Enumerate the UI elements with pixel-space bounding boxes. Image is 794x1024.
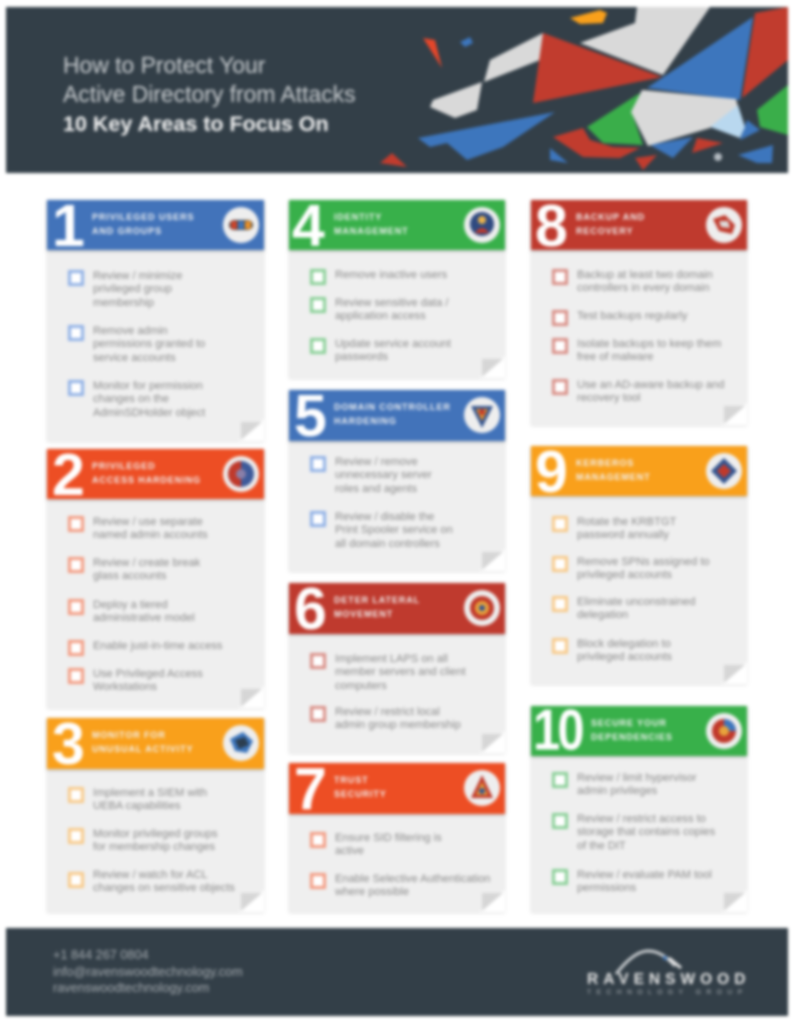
logo: Ravenswood Technology Group: RAVENSWOOD bbox=[587, 971, 750, 988]
panel: 1 privileged users and groups bbox=[47, 200, 264, 441]
panel header 3: UNUSUAL ACTIVITY bbox=[92, 744, 193, 754]
checklist item bbox=[66, 666, 204, 693]
panel: 7 trust security: where possible bbox=[335, 886, 409, 898]
panel header 5: DOMAIN CONTROLLER bbox=[334, 402, 451, 412]
panel: 2 privileged access hardening: glass accounts bbox=[93, 570, 166, 582]
panel header 10 bbox=[531, 706, 747, 756]
panel header 3: 3 bbox=[52, 711, 85, 777]
checklist item bbox=[550, 514, 676, 542]
panel header 6 bbox=[289, 583, 505, 634]
panel: 8 backup and recovery: free of malware bbox=[577, 351, 653, 363]
panel: 1 privileged users and groups: Review / minimize bbox=[93, 270, 182, 282]
panel: 7 trust security: Ensure SID filtering is bbox=[335, 832, 442, 844]
panel: 5 domain controller hardening: unnecessary server bbox=[335, 469, 432, 481]
panel header 7: TRUST bbox=[334, 775, 368, 785]
checklist item bbox=[66, 826, 218, 854]
panel: 1 privileged users and groups: Remove admin bbox=[93, 324, 168, 336]
panel: 5 domain controller hardening: all domain controllers bbox=[335, 538, 440, 550]
panel: 4 identity management: Remove inactive users bbox=[335, 268, 447, 280]
checklist item bbox=[66, 868, 236, 895]
panel: 6 deter lateral movement: Review / restrict local bbox=[335, 706, 440, 718]
title: 10 Key Areas to Focus On bbox=[63, 112, 329, 136]
panel header 1: AND GROUPS bbox=[92, 226, 162, 236]
panel: 9 kerberos management: privileged accounts bbox=[577, 569, 672, 581]
checklist item bbox=[66, 785, 208, 812]
checklist item bbox=[550, 867, 713, 894]
checklist item bbox=[66, 554, 201, 583]
panel: 8 backup and recovery: Isolate backups to keep them bbox=[577, 338, 721, 350]
panel: 9 kerberos management: privileged accounts bbox=[577, 651, 672, 663]
checklist item bbox=[66, 638, 224, 658]
panel: 2 privileged access hardening: Review / create break bbox=[93, 556, 200, 568]
panel header 7: SECURITY bbox=[334, 789, 387, 799]
checklist item bbox=[308, 454, 432, 496]
checklist item bbox=[66, 378, 206, 420]
panel header 5 bbox=[289, 390, 505, 441]
panel header 6: MOVEMENT bbox=[334, 609, 393, 619]
checklist item bbox=[550, 770, 697, 798]
panel: 6 deter lateral movement: computers bbox=[335, 680, 387, 692]
panel: 9 kerberos management: Remove SPNs assigned to bbox=[577, 556, 710, 568]
checklist item bbox=[550, 377, 726, 404]
panel header 2: PRIVILEGED bbox=[92, 461, 156, 471]
panel header 4: MANAGEMENT bbox=[334, 226, 408, 236]
panel header 2: 2 bbox=[52, 442, 85, 508]
panel: 2 privileged access hardening: Deploy a tiered bbox=[93, 598, 168, 610]
panel: 4 identity management: Update service account bbox=[335, 338, 451, 350]
panel header 3 bbox=[47, 718, 264, 769]
checklist item bbox=[550, 811, 716, 852]
shattered polygon artwork bbox=[379, 4, 790, 172]
checklist item bbox=[550, 594, 696, 622]
contact details: +1 844 267 0804 bbox=[53, 948, 149, 962]
panel: 7 trust security bbox=[289, 763, 505, 912]
panel: 8 backup and recovery: controllers in every domain bbox=[577, 282, 710, 294]
panel: 6 deter lateral movement: member servers and client bbox=[335, 666, 466, 678]
panel header 8: RECOVERY bbox=[576, 226, 633, 236]
panel: 1 privileged users and groups: service accounts bbox=[93, 352, 176, 364]
panel: 1 privileged users and groups: AdminSDHolder object bbox=[93, 407, 205, 419]
panel header 8: 8 bbox=[535, 193, 568, 259]
checklist item bbox=[550, 336, 722, 363]
title: Active Directory from Attacks bbox=[63, 81, 356, 107]
title bbox=[62, 52, 357, 138]
panel header 3: MONITOR FOR bbox=[92, 730, 166, 740]
checklist item bbox=[550, 554, 711, 582]
panel: 3 monitor for unusual activity: Monitor privileged groups bbox=[93, 828, 218, 840]
footer bar bbox=[6, 928, 788, 1016]
panel: 2 privileged access hardening bbox=[47, 449, 264, 708]
panel: 4 identity management bbox=[289, 200, 505, 378]
panel header 4 bbox=[289, 200, 505, 250]
checklist item bbox=[308, 267, 448, 287]
panel: 3 monitor for unusual activity: UEBA capabilities bbox=[93, 800, 181, 812]
contact details: info@ravenswoodtechnology.com bbox=[53, 964, 243, 978]
panel: 10 secure your dependencies bbox=[531, 706, 747, 912]
checklist item bbox=[66, 323, 206, 364]
panel: 9 kerberos management: delegation bbox=[577, 609, 628, 621]
panel: 1 privileged users and groups: Monitor for permission bbox=[93, 380, 203, 392]
panel: 2 privileged access hardening: Workstations bbox=[93, 681, 157, 693]
panel header 9 bbox=[531, 446, 747, 496]
panel header 4: IDENTITY bbox=[334, 212, 382, 222]
panel: 1 privileged users and groups: changes on the bbox=[93, 393, 169, 405]
panel: 10 secure your dependencies: storage that contains copies bbox=[577, 826, 715, 838]
panel: 10 secure your dependencies: Review / restrict access to bbox=[577, 812, 706, 824]
panel header 2 bbox=[47, 449, 264, 499]
panel: 5 domain controller hardening: Print Spooler service on bbox=[335, 524, 453, 536]
checklist item bbox=[308, 336, 452, 363]
panel: 5 domain controller hardening: Review / remove bbox=[335, 456, 418, 468]
panel: 5 domain controller hardening bbox=[289, 390, 505, 571]
panel header 7: 7 bbox=[294, 756, 327, 822]
checklist item bbox=[66, 268, 184, 309]
panel header 5: HARDENING bbox=[334, 416, 397, 426]
panel header 7 bbox=[289, 763, 505, 814]
header banner bbox=[6, 7, 788, 173]
panel header 1: PRIVILEGED USERS bbox=[92, 212, 194, 222]
panel: 8 backup and recovery: Backup at least two domain bbox=[577, 268, 713, 280]
checklist item bbox=[66, 596, 196, 624]
panel: 6 deter lateral movement: admin group membership bbox=[335, 719, 461, 731]
panel: 10 secure your dependencies: Review / limit hypervisor bbox=[577, 772, 697, 784]
panel: 2 privileged access hardening: Use Privileged Access bbox=[93, 668, 203, 680]
panel: 2 privileged access hardening: Enable just-in-time access bbox=[93, 640, 222, 652]
panel: 4 identity management: Review sensitive data / bbox=[335, 296, 448, 308]
panel: 10 secure your dependencies: Review / evaluate PAM tool bbox=[577, 868, 712, 880]
checklist item bbox=[308, 295, 450, 322]
panel header 6: 6 bbox=[294, 576, 327, 642]
panel: 2 privileged access hardening: named admin accounts bbox=[93, 529, 208, 541]
checklist item bbox=[308, 651, 466, 692]
contact details: ravenswoodtechnology.com bbox=[53, 981, 209, 995]
checklist item bbox=[308, 830, 442, 857]
panel header 9: KERBEROS bbox=[576, 458, 634, 468]
panel: 8 backup and recovery: Test backups regularly bbox=[577, 310, 687, 322]
panel: 7 trust security: Enable Selective Authentication bbox=[335, 872, 490, 884]
panel: 6 deter lateral movement bbox=[289, 583, 505, 753]
panel: 1 privileged users and groups: membership bbox=[93, 297, 154, 309]
panel header 6: DETER LATERAL bbox=[334, 595, 420, 605]
panel: 3 monitor for unusual activity: Implement a SIEM with bbox=[93, 786, 207, 798]
panel header 9: 9 bbox=[535, 439, 568, 505]
checklist item bbox=[66, 514, 208, 541]
panel: 3 monitor for unusual activity: changes on sensitive objects bbox=[93, 882, 235, 894]
panel header 10: SECURE YOUR bbox=[591, 718, 667, 728]
panel: 1 privileged users and groups: permissions granted to bbox=[93, 338, 205, 350]
checklist item bbox=[550, 267, 714, 294]
panel header 8: BACKUP AND bbox=[576, 212, 645, 222]
panel: 9 kerberos management: Block delegation to bbox=[577, 638, 671, 650]
panel header 4: 4 bbox=[292, 193, 325, 259]
panel: 10 secure your dependencies: permissions bbox=[577, 882, 636, 894]
panel: 8 backup and recovery bbox=[531, 200, 747, 425]
panel: 9 kerberos management: password annually bbox=[577, 529, 669, 541]
panel: 6 deter lateral movement: Implement LAPS on all bbox=[335, 652, 448, 664]
logo: Ravenswood Technology Group bbox=[586, 947, 750, 996]
panel: 4 identity management: passwords bbox=[335, 351, 388, 363]
panel header 5: 5 bbox=[294, 383, 327, 449]
panel: 10 secure your dependencies: admin privileges bbox=[577, 785, 657, 797]
panel: 4 identity management: application access bbox=[335, 310, 426, 322]
panel header 9: MANAGEMENT bbox=[576, 472, 650, 482]
title: How to Protect Your bbox=[63, 52, 265, 78]
panel header 10: 10 bbox=[533, 699, 582, 763]
panel: 3 monitor for unusual activity: Review / watch for ACL bbox=[93, 868, 208, 880]
panel header 1 bbox=[47, 200, 264, 250]
panel: 3 monitor for unusual activity bbox=[47, 718, 264, 912]
logo: Ravenswood Technology Group: TECHNOLOGY GROUP bbox=[587, 989, 748, 996]
panel: 3 monitor for unusual activity: for membership changes bbox=[93, 841, 215, 853]
contact details bbox=[52, 948, 244, 996]
panel: 2 privileged access hardening: Review / use separate bbox=[93, 516, 203, 528]
panel: 9 kerberos management: Rotate the KRBTGT bbox=[577, 516, 676, 528]
panel: 5 domain controller hardening: roles and agents bbox=[335, 483, 417, 495]
checklist item bbox=[308, 870, 492, 898]
checklist item bbox=[550, 636, 673, 664]
panel: 10 secure your dependencies: of the DIT bbox=[577, 840, 626, 852]
panel header 1: 1 bbox=[52, 193, 85, 259]
panel header 10: DEPENDENCIES bbox=[591, 732, 673, 742]
panel header 2: ACCESS HARDENING bbox=[92, 475, 201, 485]
panel: 5 domain controller hardening: Review / disable the bbox=[335, 510, 434, 522]
checklist item bbox=[308, 704, 462, 732]
checklist item bbox=[550, 308, 688, 328]
panel: 9 kerberos management: Eliminate unconstrained bbox=[577, 596, 695, 608]
panel: 8 backup and recovery: recovery tool bbox=[577, 392, 641, 404]
panel: 2 privileged access hardening: administrative model bbox=[93, 612, 195, 624]
panel: 8 backup and recovery: Use an AD-aware backup and bbox=[577, 378, 724, 390]
panel: 7 trust security: active bbox=[335, 845, 364, 857]
panel: 1 privileged users and groups: privileged group bbox=[93, 283, 172, 295]
panel header 8 bbox=[531, 200, 747, 250]
checklist item bbox=[308, 509, 454, 550]
panel: 9 kerberos management bbox=[531, 446, 747, 684]
